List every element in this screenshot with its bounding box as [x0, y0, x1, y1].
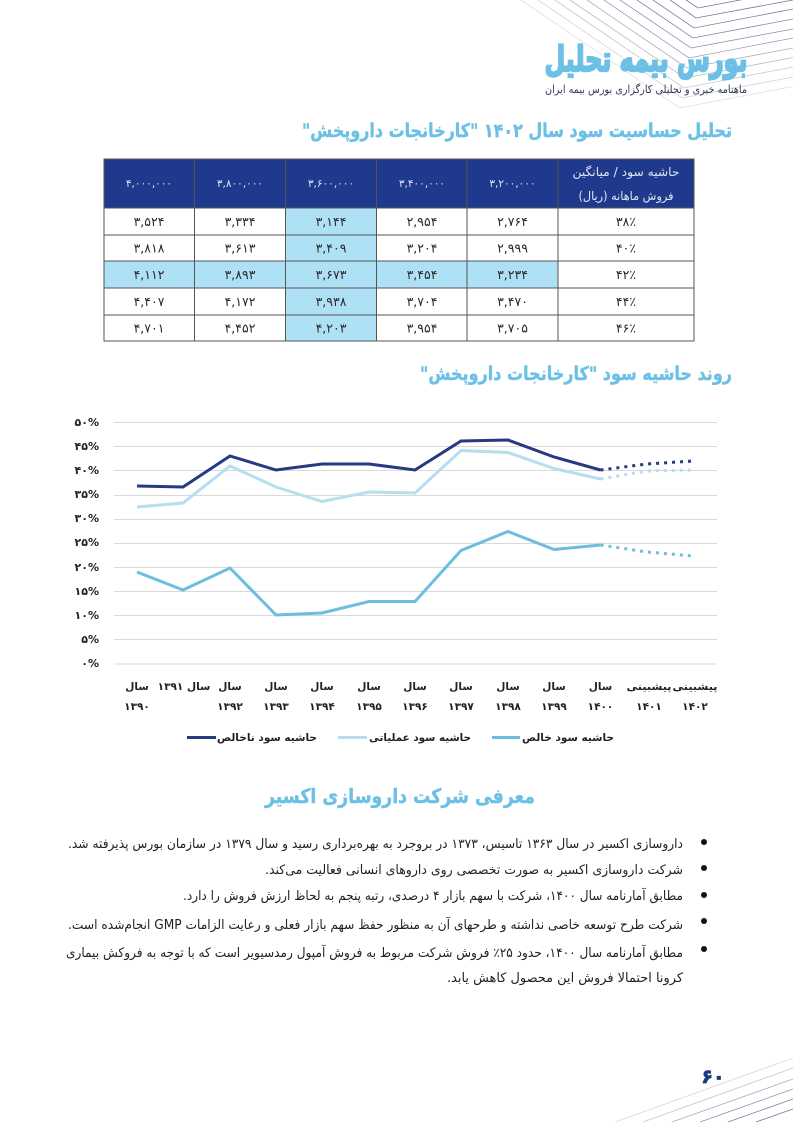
x axis labels: سال: [496, 681, 520, 693]
x axis labels: ۱۳۹۶: [402, 701, 428, 713]
bullet list: company facts: شرکت داروسازی اکسیر به صورت تخصصی روی داروهای انسانی فعالیت می‌کند.: [265, 863, 683, 878]
legend: [187, 732, 614, 744]
table header row: ۴,۰۰۰,۰۰۰: [126, 178, 172, 190]
table header row: حاشیه سود / میانگین: [572, 165, 680, 180]
x axis labels: ۱۴۰۰: [588, 701, 613, 713]
x axis labels: سال: [264, 681, 288, 693]
table row 44%: [134, 294, 636, 309]
table row 40%: ۳,۴۰۹: [316, 240, 347, 256]
table row 42%: [134, 267, 636, 282]
x axis labels: ۱۳۹۵: [356, 701, 382, 713]
table row 44%: ۳,۴۷۰: [497, 294, 528, 309]
table row 42%: ۳,۴۵۴: [407, 267, 437, 282]
table row 38%: ۲,۷۶۴: [497, 214, 528, 229]
y axis labels: ۴۵%: [75, 440, 99, 453]
series: net margin: [137, 532, 693, 615]
y axis labels: ۴۰%: [75, 464, 99, 477]
line chart: profit margins: [75, 416, 718, 744]
table row 42%: ۳,۸۹۳: [225, 267, 256, 282]
table row 44%: ۴۴٪: [616, 294, 636, 309]
table row 40%: ۳,۸۱۸: [134, 240, 165, 256]
table row 40%: ۳,۲۰۴: [407, 240, 437, 256]
y axis labels: ۰%: [81, 657, 99, 670]
table row 46%: [134, 320, 636, 336]
table row 40%: ۲,۹۹۹: [497, 240, 528, 256]
table row 38%: ۳۸٪: [616, 214, 636, 229]
table row 46%: ۴۶٪: [616, 320, 636, 336]
bullet list: company facts: داروسازی اکسیر در سال ۱۳۶۳ تاسیس، ۱۳۷۳ در بروجرد به بهره‌برداری رسید و سال ۱۳۷۹ در سازمان بورس پذیرفته شد.: [68, 837, 683, 852]
header logo: [544, 40, 748, 96]
x axis labels: سال: [125, 681, 149, 693]
bullet list: company facts: [66, 837, 707, 986]
y axis labels: [75, 416, 99, 670]
table header row: ۳,۸۰۰,۰۰۰: [217, 178, 263, 190]
heading: profit margin trend: روند حاشیه سود "کارخانجات داروپخش": [420, 363, 732, 385]
table row 42%: ۴۲٪: [616, 267, 636, 282]
table header row: فروش ماهانه (ریال): [578, 189, 674, 204]
y axis labels: ۱۵%: [75, 585, 99, 598]
table row 40%: ۴۰٪: [616, 240, 636, 256]
x axis labels: ۱۴۰۱: [636, 701, 662, 713]
x axis labels: سال: [218, 681, 242, 693]
bullet list: company facts: مطابق آمارنامه سال ۱۴۰۰، شرکت با سهم بازار ۴ درصدی، رتبه پنجم به لحاظ ارزش فروش را دارد.: [183, 887, 683, 904]
legend: حاشیه سود خالص: [522, 732, 614, 744]
table row 42%: ۴,۱۱۲: [134, 267, 165, 282]
x axis labels: [124, 681, 718, 713]
x axis labels: ۱۳۹۲: [217, 701, 243, 713]
table row 38%: ۲,۹۵۴: [407, 214, 437, 229]
table row 46%: ۴,۷۰۱: [134, 320, 164, 336]
y axis labels: ۲۵%: [75, 536, 99, 549]
x axis labels: ۱۳۹۰: [124, 701, 150, 713]
heading: company introduction: معرفی شرکت داروسازی اکسیر: [264, 784, 535, 808]
x axis labels: سال: [357, 681, 381, 693]
legend: حاشیه سود عملیاتی: [369, 732, 471, 744]
y axis labels: ۵۰%: [75, 416, 99, 429]
table header row: ۳,۶۰۰,۰۰۰: [308, 178, 354, 190]
x axis labels: پیشبینی: [672, 681, 718, 693]
y axis labels: ۳۰%: [75, 512, 99, 525]
page number: ۶۰: [701, 1066, 725, 1088]
x axis labels: سال: [449, 681, 473, 693]
table row 38%: ۳,۱۴۴: [316, 214, 346, 229]
y axis labels: ۳۵%: [75, 488, 99, 501]
x axis labels: سال: [403, 681, 427, 693]
table row 44%: ۴,۴۰۷: [134, 294, 165, 309]
table row 44%: ۴,۱۷۲: [225, 294, 256, 309]
table row 42%: ۳,۲۳۴: [497, 267, 528, 282]
table row 40%: [134, 240, 636, 256]
x axis labels: ۱۳۹۳: [263, 701, 289, 713]
x axis labels: سال ۱۳۹۱: [158, 681, 210, 693]
logo subtitle: ماهنامه خبری و تحلیلی کارگزاری بورس بیمه ایران: [545, 83, 747, 96]
table row 46%: ۴,۲۰۳: [316, 320, 347, 336]
x axis labels: سال: [589, 681, 612, 693]
table row 42%: ۳,۶۷۳: [316, 267, 347, 282]
series: operating margin: [137, 450, 693, 507]
y axis labels: ۱۰%: [75, 609, 99, 622]
table row 38%: ۳,۳۳۴: [225, 214, 255, 229]
legend: حاشیه سود ناخالص: [217, 732, 317, 744]
bullet list: company facts: شرکت طرح توسعه خاصی نداشته و طرحهای آن به منظور حفظ سهم بازار فعلی و رعایت الزامات GMP انجام‌شده است.: [68, 916, 683, 933]
x axis labels: ۱۳۹۴: [309, 701, 335, 713]
table header row: ۳,۴۰۰,۰۰۰: [399, 178, 445, 190]
x axis labels: ۱۳۹۹: [541, 701, 567, 713]
x axis labels: پیشبینی: [626, 681, 672, 693]
series: gross margin: [137, 440, 693, 487]
table header row: [126, 165, 680, 204]
y axis labels: ۲۰%: [75, 561, 99, 574]
table row 46%: ۳,۷۰۵: [497, 320, 528, 336]
y axis labels: ۵%: [81, 633, 99, 646]
x axis labels: ۱۳۹۷: [448, 701, 474, 713]
table row 38%: ۳,۵۲۴: [134, 214, 164, 229]
table row 44%: ۳,۹۳۸: [316, 294, 347, 309]
x axis labels: ۱۳۹۸: [495, 701, 521, 713]
sensitivity table: [104, 159, 694, 341]
table row 46%: ۳,۹۵۴: [407, 320, 437, 336]
bullet list: company facts: مطابق آمارنامه سال ۱۴۰۰، حدود ۲۵٪ فروش شرکت مربوط به فروش آمپول رمدسیویر است که با توجه به فروکش بیماری: [66, 944, 683, 961]
heading: sensitivity analysis: تحلیل حساسیت سود سال ۱۴۰۲ "کارخانجات داروپخش": [302, 120, 732, 142]
table header row: ۳,۲۰۰,۰۰۰: [489, 178, 536, 190]
x axis labels: سال: [310, 681, 334, 693]
table row 40%: ۳,۶۱۳: [225, 240, 256, 256]
x axis labels: سال: [542, 681, 566, 693]
table row 44%: ۳,۷۰۴: [407, 294, 437, 309]
table row 46%: ۴,۴۵۲: [225, 320, 256, 336]
x axis labels: ۱۴۰۲: [682, 701, 708, 713]
table row 38%: [134, 214, 636, 229]
bullet list: company facts: کرونا احتمالا فروش این محصول کاهش یابد.: [447, 971, 684, 986]
